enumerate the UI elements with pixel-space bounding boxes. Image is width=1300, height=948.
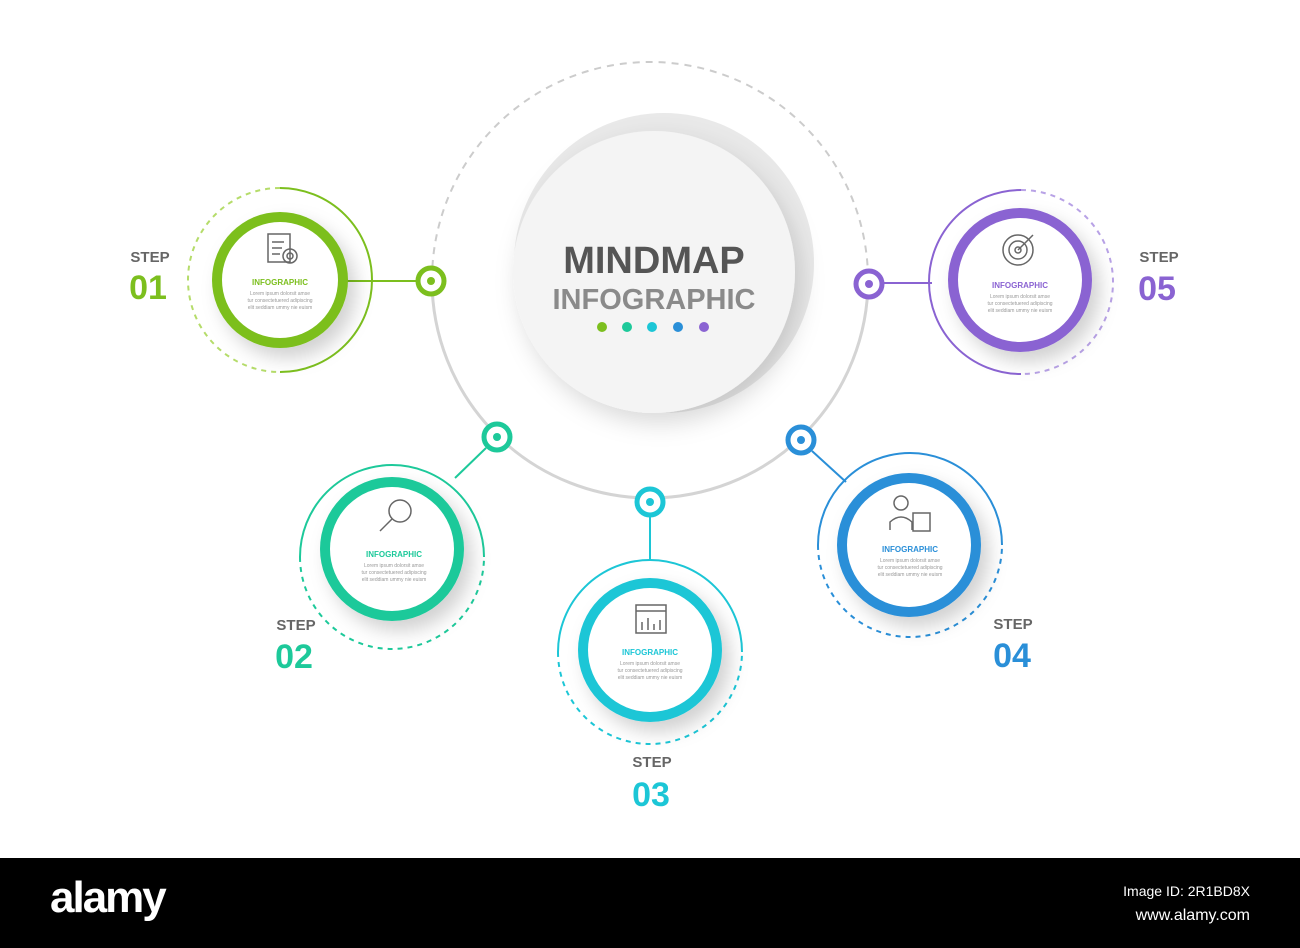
step 03: Lorem ipsum dolorsit amse [620,661,680,667]
connector lines [346,281,932,561]
step label 03: STEP [632,754,672,771]
step 05 [929,190,1179,374]
step label 02: STEP [276,617,316,634]
node 02 [484,424,510,450]
footer bar: www.alamy.com [1135,907,1250,924]
icon: checklist [268,234,297,263]
step 03: 03 [632,776,670,814]
step 04: elit seddiam ummy nie euism [878,572,942,578]
icon: magnifier [380,500,411,531]
step 01: tur consectetuered adipiscing [247,298,313,304]
node 01 [418,268,444,294]
central circle [513,113,814,413]
big orbit circle [432,62,868,498]
icon: target [1003,235,1033,265]
step 04: 04 [993,637,1031,675]
step label 04: STEP [993,616,1033,633]
step 02 [275,465,484,676]
step 04 [818,453,1033,675]
step 04: Lorem ipsum dolorsit amse [880,558,940,564]
step 03: INFOGRAPHIC [622,648,678,657]
color dots [597,322,709,332]
step 01: 01 [129,269,167,307]
step 03: tur consectetuered adipiscing [617,668,683,674]
step label 01: STEP [130,249,170,266]
step 03: elit seddiam ummy nie euism [618,675,682,681]
step 02: elit seddiam ummy nie euism [362,577,426,583]
footer bar: Image ID: 2R1BD8X [1123,883,1251,899]
step 02: tur consectetuered adipiscing [361,570,427,576]
step 01: elit seddiam ummy nie euism [248,305,312,311]
node 04 [788,427,814,453]
step 02: 02 [275,638,313,676]
node 05 [856,271,882,297]
step 02: Lorem ipsum dolorsit amse [364,563,424,569]
step 04: INFOGRAPHIC [882,545,938,554]
step 05: 05 [1138,270,1176,308]
node 03 [637,489,663,515]
footer bar: alamy [50,873,167,922]
step 01: INFOGRAPHIC [252,278,308,287]
step 04: tur consectetuered adipiscing [877,565,943,571]
step 05: elit seddiam ummy nie euism [988,308,1052,314]
step 05: tur consectetuered adipiscing [987,301,1053,307]
step 01 [129,188,372,372]
step 03 [558,560,742,814]
central circle: INFOGRAPHIC [552,284,756,316]
step 05: INFOGRAPHIC [992,281,1048,290]
step label 05: STEP [1139,249,1179,266]
icon: person [890,496,930,531]
footer bar [0,858,1300,948]
step 01: Lorem ipsum dolorsit amse [250,291,310,297]
step 05: Lorem ipsum dolorsit amse [990,294,1050,300]
icon: chart [636,605,666,633]
title: MINDMAP [563,240,745,282]
step 02: INFOGRAPHIC [366,550,422,559]
